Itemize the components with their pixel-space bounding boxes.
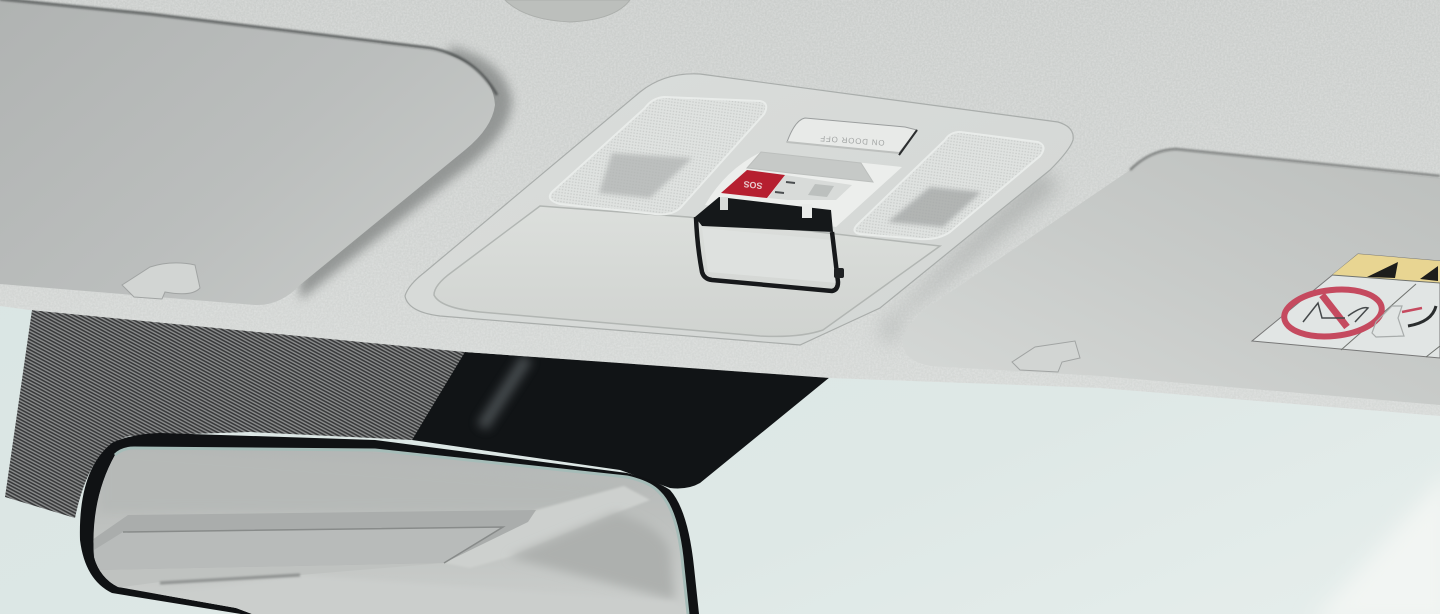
telematics button panel [721,170,852,200]
black tinted band [412,352,830,488]
reflected console [92,510,536,572]
three position switch: ON DOOR OFF [819,134,885,147]
SOS button: SOS [743,179,763,191]
left map lamp [550,97,766,214]
right map lamp [854,132,1044,239]
visor clip right [1012,341,1080,372]
storage lid [434,206,940,336]
rear view mirror [80,433,700,614]
button recess [705,152,902,227]
mirror reflected light strip [444,486,650,568]
right sun visor [880,149,1440,405]
black open SOS module frame [695,197,844,291]
headliner [0,0,1440,416]
visor clip [122,263,200,299]
top dome light edge [505,0,630,22]
hood flap [747,152,873,182]
no-airbag symbol [1282,285,1384,341]
windshield dotted frit band [5,310,830,518]
warning sticker [1252,254,1440,358]
overhead console [405,74,1073,345]
three position switch [787,118,917,155]
left sun visor [0,0,512,305]
